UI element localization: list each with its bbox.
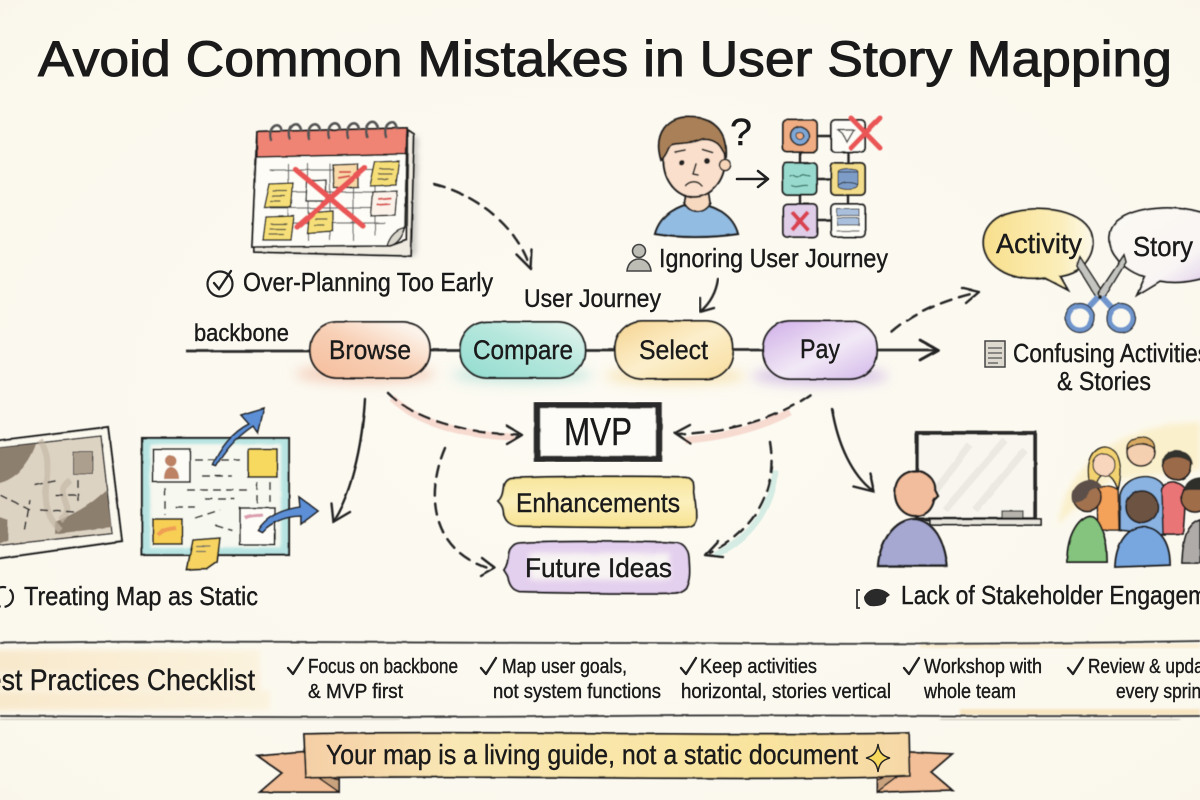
caption: confusing activities and stories: & Stories — [1057, 366, 1151, 396]
label: enhancements: Enhancements — [516, 488, 680, 518]
icon: story map board — [142, 438, 289, 570]
panel: treating map as static — [0, 408, 318, 611]
pill: compare — [460, 322, 585, 378]
icon: question mark: ? — [730, 112, 752, 154]
arrow: dashed to future ideas left — [435, 448, 495, 576]
label: user journey: User Journey — [524, 285, 661, 313]
label: story: Story — [1133, 231, 1193, 262]
icon: story speech bubble — [1109, 208, 1200, 295]
icon: stakeholder group — [1058, 422, 1200, 567]
panel: mvp priority stack — [498, 405, 696, 593]
icon: calendar with red cross — [252, 122, 418, 256]
label: browse: Browse — [329, 335, 411, 365]
caption: over-planning too early: Over-Planning Too Early — [243, 267, 493, 297]
checklist item: workshop with whole team — [904, 656, 1042, 703]
arrow: dashed to future ideas right — [705, 442, 775, 557]
label: select: Select — [639, 335, 708, 365]
label: backbone: backbone — [194, 320, 289, 347]
banner: living guide message — [258, 733, 952, 792]
caption: confusing activities and stories — [985, 338, 1200, 396]
title: Avoid Common Mistakes in User Story Mapping — [38, 31, 1172, 87]
pill: browse — [310, 322, 430, 378]
panel: lack of stakeholder engagement — [857, 422, 1200, 610]
checklist item: map user goals: not system functions — [493, 681, 661, 703]
checklist item: review and update — [1068, 656, 1200, 703]
checklist item: keep activities horizontal: horizontal, stories vertical — [681, 681, 891, 703]
panel: over-planning too early — [208, 122, 493, 297]
chart: user journey backbone flow — [186, 321, 938, 385]
panel: best practices checklist — [0, 641, 1200, 720]
arrow: pay to mvp — [675, 395, 810, 443]
checklist item: workshop with whole team: whole team — [923, 681, 1016, 703]
pill: select — [615, 321, 733, 379]
icon: scissors — [1066, 255, 1136, 332]
arrow: blue right arrow — [258, 497, 318, 532]
box: future ideas — [504, 542, 690, 593]
box: enhancements — [498, 476, 696, 527]
label: mvp: MVP — [564, 411, 632, 454]
arrow: browse to treating map — [331, 399, 365, 522]
panel: ignoring user journey — [627, 112, 888, 273]
icon: activity speech bubble — [983, 209, 1093, 290]
arrow: over-planning to user journey — [434, 184, 532, 269]
arrow: pay to confusing activities — [892, 288, 979, 332]
label: compare: Compare — [473, 335, 573, 365]
box: mvp — [537, 405, 659, 459]
panel: confusing activities and stories — [983, 208, 1200, 396]
arrow: browse to mvp — [388, 393, 522, 444]
icon: confused person — [655, 117, 738, 237]
arrow: ignoring user journey to select — [700, 279, 718, 312]
arrow: pay to stakeholder engagement — [832, 409, 874, 492]
pill: pay — [763, 321, 877, 379]
checklist item: map user goals — [481, 656, 661, 703]
caption: treating map as static: Treating Map as Static — [24, 581, 258, 611]
checklist item: focus on backbone: Focus on backbone — [308, 656, 458, 678]
checklist item: keep activities horizontal — [681, 656, 891, 703]
icon: old static map — [0, 427, 122, 559]
checklist item: keep activities horizontal: Keep activities — [700, 656, 817, 678]
label: pay: Pay — [800, 334, 840, 364]
checklist item: focus on backbone: & MVP first — [308, 681, 403, 703]
checklist item: map user goals: Map user goals, — [502, 656, 627, 678]
arrow: person to system — [737, 171, 768, 187]
caption: ignoring user journey: Ignoring User Journey — [659, 243, 888, 273]
arrow: blue upward arrow — [213, 408, 264, 466]
icon: whiteboard — [917, 433, 1041, 525]
icon: system function grid — [783, 118, 880, 237]
icon: sparkle — [866, 744, 890, 772]
banner text: Your map is a living guide, not a static document — [326, 739, 858, 770]
label: future ideas: Future Ideas — [525, 553, 672, 583]
checklist item: workshop with whole team: Workshop with — [924, 656, 1042, 678]
icon: lone person — [878, 471, 947, 566]
label: activity: Activity — [996, 228, 1082, 259]
band: checklist background — [0, 641, 1200, 720]
checklist item: focus on backbone — [288, 656, 458, 703]
